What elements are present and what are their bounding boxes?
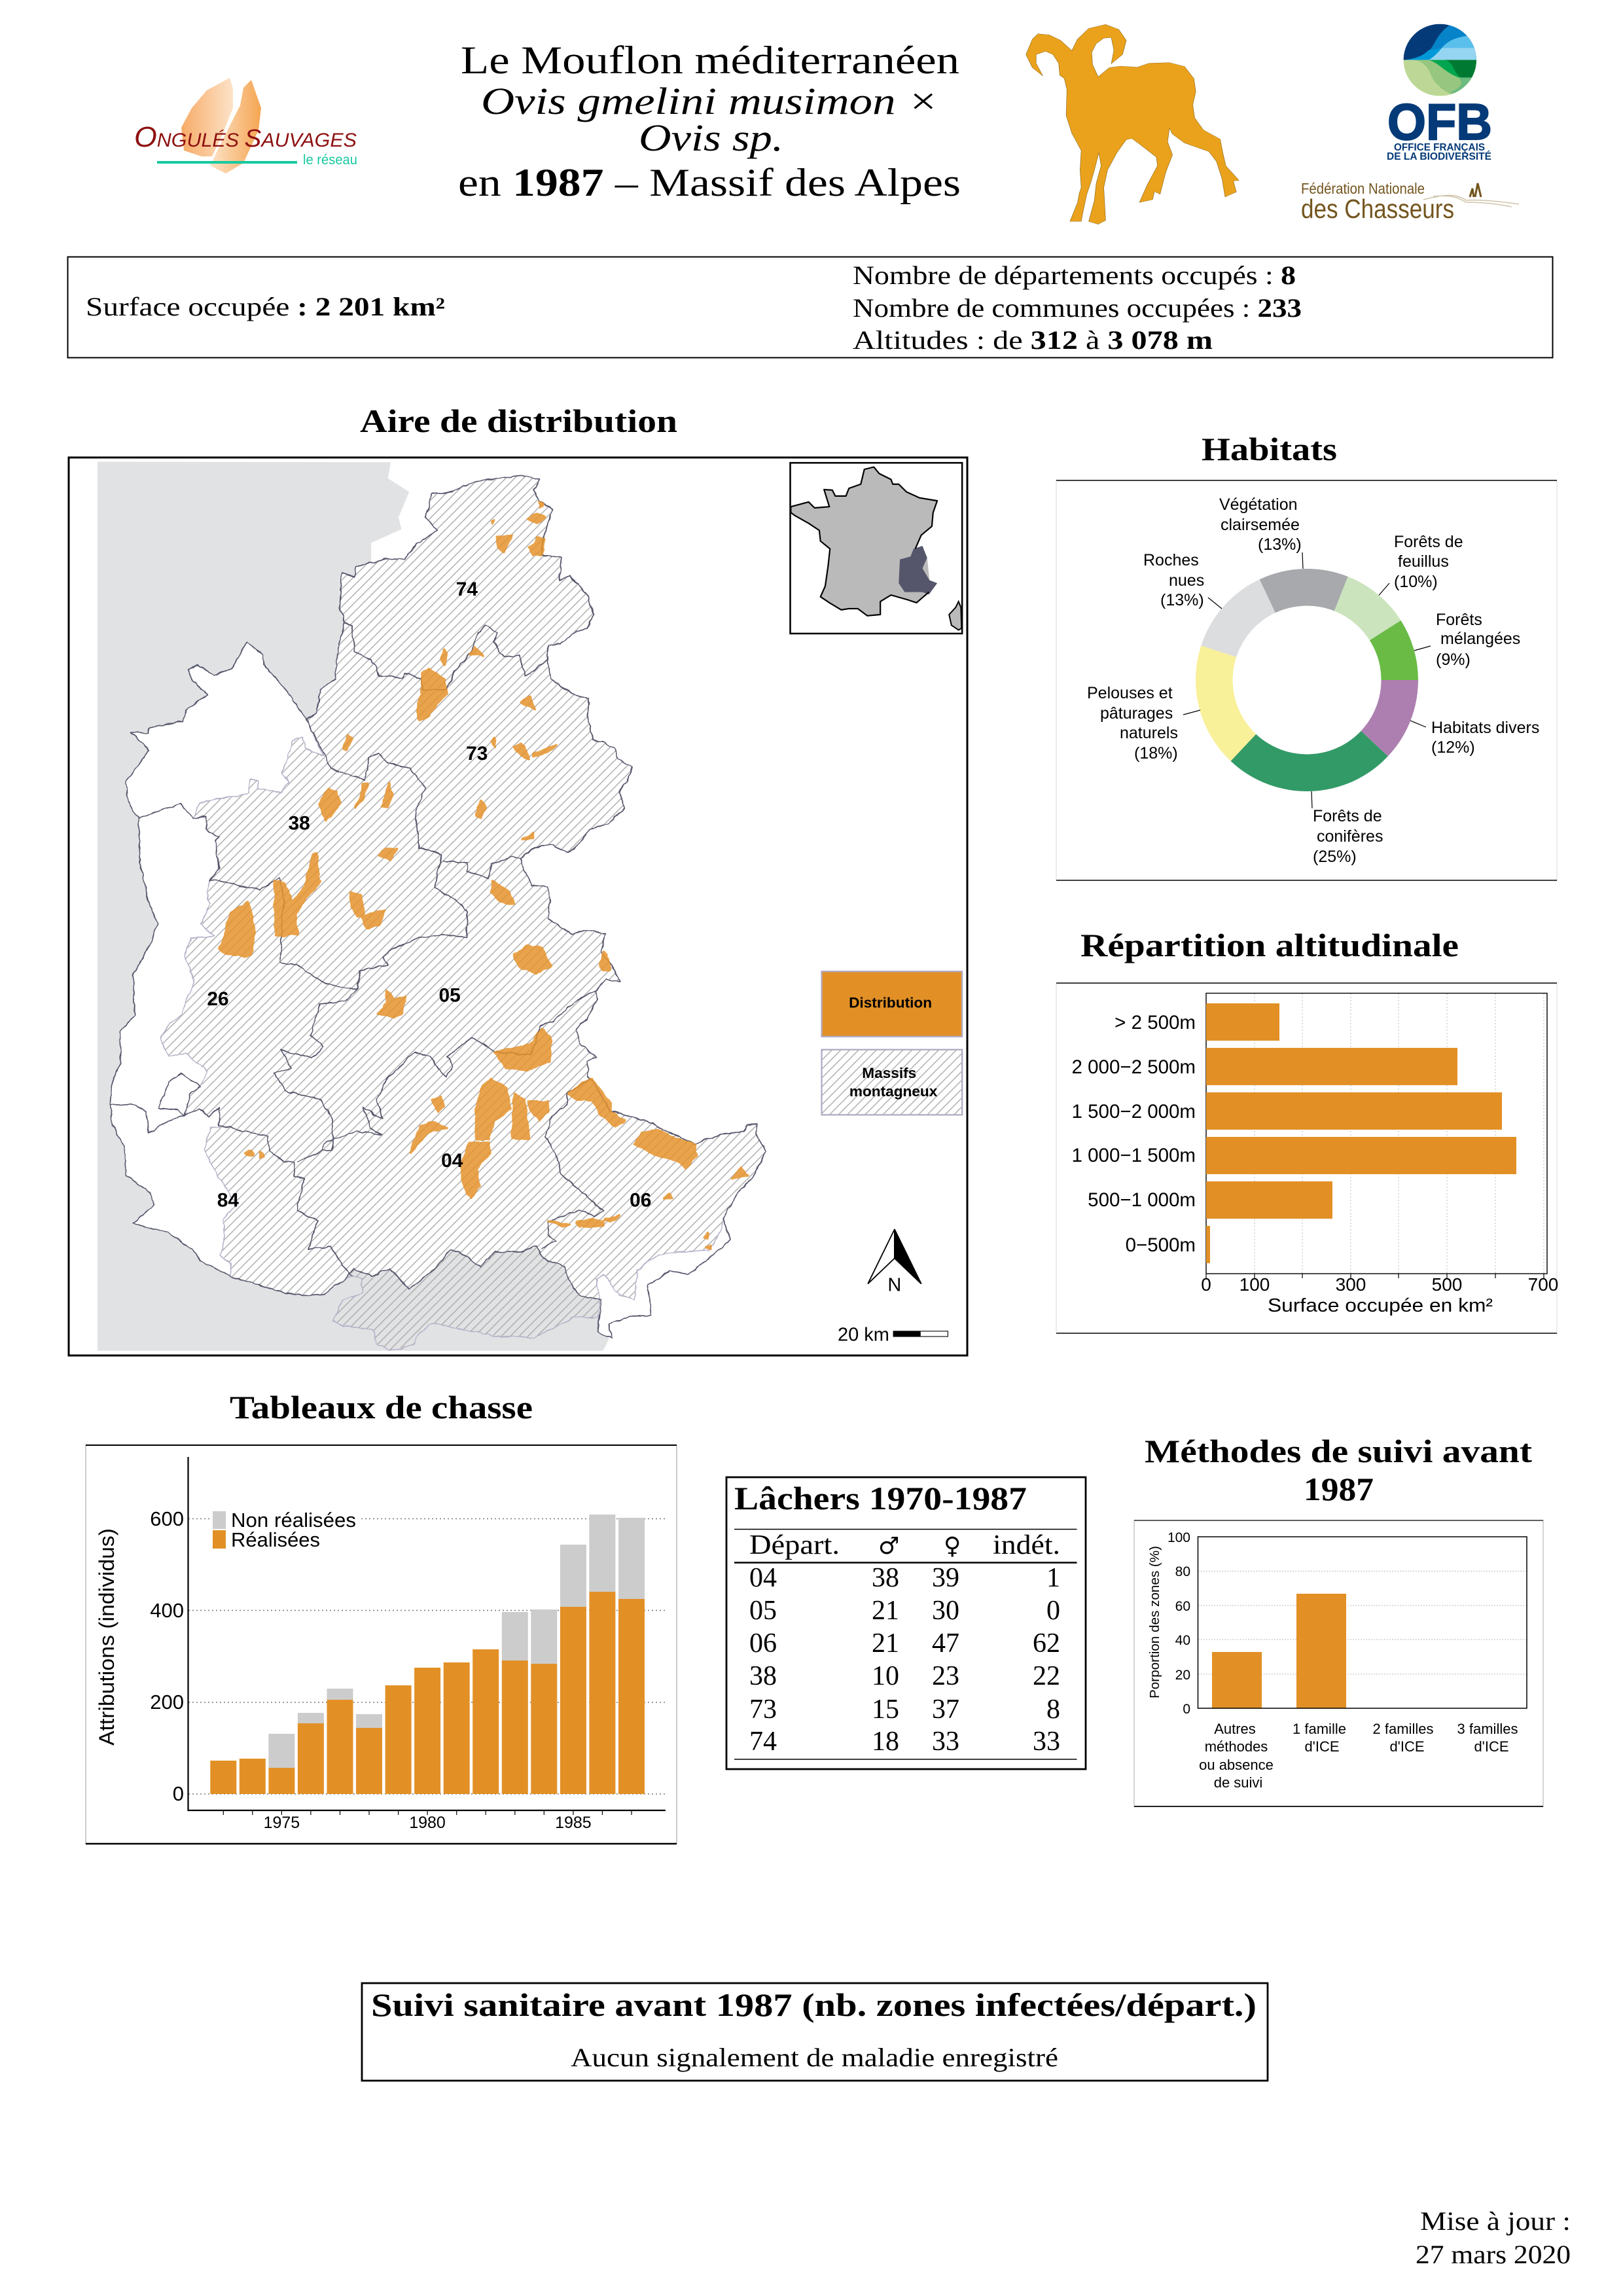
icon: north arrow (868, 1229, 921, 1295)
table rows: 8 (1046, 1695, 1060, 1725)
category labels: > 2 500m (1115, 1012, 1196, 1033)
logo: Fédération Nationale des Chasseurs (1301, 180, 1519, 224)
logo: Fédération Nationale des Chasseurs: des Chasseurs (1301, 194, 1454, 224)
table rows: 21 (872, 1628, 899, 1659)
axis labels (264, 1814, 592, 1832)
title: Ovis gmelini musimon × (481, 80, 938, 122)
logo: OFB: OFFICE FRANÇAIS (1394, 142, 1485, 153)
table header: indét. (993, 1530, 1060, 1560)
table header: Départ. (749, 1530, 840, 1560)
table rows: 21 (872, 1596, 899, 1626)
category labels: 3 familles (1457, 1721, 1518, 1737)
panel: hunting bag stacked bar chart (86, 1445, 677, 1844)
x axis title: Surface occupée en km² (1268, 1295, 1493, 1316)
legend (211, 1509, 360, 1551)
text: no disease recorded: Aucun signalement de maladie enregistré (571, 2043, 1058, 2072)
table rules (734, 1529, 1077, 1759)
category labels: d'ICE (1389, 1738, 1425, 1755)
logo: Ongulés sauvages (134, 78, 357, 173)
category labels: 500−1 000m (1088, 1189, 1196, 1211)
y axis labels: 600 (150, 1507, 184, 1530)
panel: Lâchers table (726, 1477, 1086, 1769)
legend: massifs montagneux: montagneux (849, 1083, 938, 1100)
table rows: 33 (932, 1727, 959, 1757)
table rows: 04 (749, 1563, 777, 1593)
table rows: 74 (749, 1727, 777, 1757)
table header (749, 1530, 1060, 1560)
realised bars (210, 1592, 645, 1794)
table rows: 1 (1046, 1563, 1060, 1593)
donut labels: Forêts (1436, 611, 1482, 629)
category labels: d'ICE (1304, 1738, 1340, 1755)
donut labels: conifères (1317, 827, 1383, 846)
heading: Méthodes de suivi avant 1987: Méthodes de suivi avant (1145, 1433, 1532, 1469)
y labels: 60 (1175, 1599, 1190, 1614)
donut labels: (18%) (1134, 744, 1178, 762)
text: communes occupied: Nombre de communes occupées : 233 (853, 293, 1302, 323)
logo: OFB: DE LA BIODIVERSITÉ (1387, 150, 1491, 162)
table rows: 23 (932, 1661, 959, 1691)
donut labels: (12%) (1431, 738, 1475, 757)
text: last update (1416, 2206, 1571, 2269)
donut labels: feuillus (1398, 552, 1449, 571)
label: department numbers: 04 (441, 1150, 463, 1172)
donut leader lines (1183, 552, 1431, 808)
map: massif outline (160, 475, 766, 1351)
grid lines (188, 1518, 666, 1794)
label: department numbers: 74 (456, 579, 478, 600)
map: department borders (111, 475, 766, 1338)
label: department numbers: 84 (217, 1190, 239, 1211)
donut labels: (25%) (1313, 848, 1357, 866)
table rows: 62 (1033, 1628, 1060, 1659)
table rows: 39 (932, 1563, 959, 1593)
text: last update: Mise à jour : (1420, 2206, 1571, 2236)
donut labels: nues (1169, 571, 1204, 590)
map: species distribution patches (220, 501, 747, 1249)
table rows: 22 (1033, 1661, 1060, 1691)
text: altitudes: Altitudes : de 312 à 3 078 m (853, 325, 1213, 355)
y axis labels: 200 (150, 1691, 184, 1713)
y axis title: Porportion des zones (%) (1148, 1546, 1162, 1698)
panel: key figures (68, 257, 1552, 357)
label: department numbers: 26 (207, 988, 229, 1010)
category labels: ou absence (1199, 1757, 1274, 1773)
label: department numbers: 38 (288, 813, 310, 834)
category labels: Autres (1214, 1721, 1256, 1737)
legend: distribution: Distribution (849, 994, 932, 1011)
scale bar (838, 1324, 948, 1345)
axis labels: 1985 (555, 1814, 592, 1832)
category labels: 2 familles (1373, 1721, 1433, 1737)
y labels (1168, 1530, 1190, 1717)
label: department numbers: 05 (438, 984, 461, 1006)
axes (188, 1457, 666, 1810)
inset: France locator map (791, 463, 962, 634)
y labels: 80 (1175, 1564, 1190, 1579)
heading: Répartition altitudinale: Répartition altitudinale (1080, 927, 1459, 963)
title (458, 39, 961, 204)
label: department numbers: 06 (630, 1190, 651, 1211)
donut labels: Végétation (1219, 495, 1298, 514)
bars (1212, 1594, 1346, 1708)
grid lines (1255, 994, 1544, 1274)
logo: OFB (1387, 24, 1492, 162)
title: en 1987 – Massif des Alpes (458, 161, 961, 204)
donut labels: naturels (1120, 724, 1178, 742)
text: departments occupied: Nombre de départements occupés : 8 (853, 260, 1296, 290)
donut labels: Forêts de (1313, 807, 1382, 825)
heading: Méthodes de suivi avant 1987: 1987 (1304, 1471, 1374, 1507)
x axis labels: 0 (1201, 1274, 1211, 1295)
heading: Méthodes de suivi avant 1987 (1145, 1433, 1532, 1507)
table rows: 30 (932, 1596, 959, 1626)
x ticks (223, 1810, 632, 1815)
donut labels: pâturages (1100, 704, 1173, 723)
logo: Ongulés sauvages: le réseau (303, 152, 357, 168)
heading: Aire de distribution: Aire de distribution (360, 403, 677, 439)
label: department numbers: 73 (466, 743, 488, 764)
category labels: 1 famille (1293, 1721, 1346, 1737)
y axis title: Attributions (individus) (95, 1528, 118, 1746)
table rows: 73 (749, 1695, 777, 1725)
table rows: 37 (932, 1695, 959, 1725)
map: hatched mountain massifs (160, 475, 766, 1351)
text: last update: 27 mars 2020 (1416, 2240, 1571, 2269)
heading: Habitats: Habitats (1202, 431, 1337, 467)
table header: ♀ (944, 1533, 961, 1560)
label: department numbers (207, 579, 651, 1211)
category labels (1199, 1721, 1518, 1791)
panel: monitoring methods bar chart (1134, 1520, 1543, 1806)
x axis labels: 100 (1240, 1274, 1270, 1295)
axis labels: 1975 (264, 1814, 300, 1832)
donut labels (1087, 495, 1539, 866)
legend: Non réalisées (231, 1509, 356, 1532)
table header: ♂ (878, 1533, 899, 1560)
plot frame (1206, 994, 1547, 1274)
donut labels: clairsemée (1221, 516, 1300, 534)
x axis labels: 700 (1528, 1274, 1558, 1295)
map: study region (111, 475, 766, 1338)
non-realised bars (268, 1515, 645, 1768)
table rows: 10 (872, 1661, 899, 1691)
table rows: 15 (872, 1695, 899, 1725)
x axis labels: 300 (1336, 1274, 1366, 1295)
heading: suivi sanitaire: Suivi sanitaire avant 1987 (nb. zones infectées/départ.) (371, 1986, 1257, 2023)
y axis labels: 0 (173, 1782, 184, 1805)
y labels: 0 (1183, 1702, 1190, 1717)
icon: mouflon silhouette (1026, 24, 1239, 224)
donut labels: mélangées (1440, 630, 1520, 648)
y labels: 20 (1175, 1668, 1190, 1683)
category labels (1072, 1012, 1196, 1256)
text: surface occupied: Surface occupée : 2 201 km² (86, 292, 445, 321)
table rows: 47 (932, 1628, 959, 1659)
scale bar: 20 km (838, 1324, 889, 1345)
logo: Ongulés sauvages: ONGULÉS SAUVAGES (134, 121, 357, 153)
table rows: 06 (749, 1628, 777, 1659)
donut labels: (9%) (1436, 651, 1471, 669)
heading: Tableaux de chasse: Tableaux de chasse (230, 1389, 533, 1426)
table rows: 38 (872, 1563, 899, 1593)
logo: OFB: OFB (1387, 93, 1492, 151)
table rows: 33 (1033, 1727, 1060, 1757)
category labels: 2 000−2 500m (1072, 1056, 1196, 1078)
table rows: 18 (872, 1727, 899, 1757)
panel: distribution map (69, 457, 967, 1355)
panel: habitats donut chart (1056, 480, 1557, 880)
title: Ovis sp. (639, 117, 783, 159)
legend: Réalisées (231, 1528, 320, 1551)
logo: Fédération Nationale des Chasseurs: Fédération Nationale (1301, 180, 1425, 197)
donut labels: Habitats divers (1431, 719, 1539, 737)
category labels: 1 000−1 500m (1072, 1145, 1196, 1166)
legend: massifs montagneux (822, 1050, 962, 1115)
y axis labels (150, 1507, 184, 1805)
y labels: 100 (1168, 1530, 1190, 1545)
table title: Lâchers 1970-1987 (734, 1480, 1027, 1516)
donut labels: (13%) (1160, 591, 1204, 609)
category labels: méthodes (1205, 1738, 1268, 1755)
panel: suivi sanitaire (362, 1983, 1268, 2081)
donut labels: Pelouses et (1087, 684, 1173, 702)
title: Le Mouflon méditerranéen (461, 39, 959, 82)
category labels: 0−500m (1126, 1234, 1196, 1256)
category labels: de suivi (1214, 1774, 1262, 1791)
legend: distribution (822, 971, 962, 1037)
category labels: d'ICE (1474, 1738, 1509, 1755)
map: neighbouring land (98, 461, 609, 1351)
legend: massifs montagneux: Massifs (862, 1065, 916, 1081)
donut labels: (13%) (1258, 535, 1302, 554)
table rows: 0 (1046, 1596, 1060, 1626)
category labels: 1 500−2 000m (1072, 1101, 1196, 1122)
donut labels: (10%) (1394, 573, 1438, 591)
icon: north arrow: N (887, 1274, 901, 1295)
table rows: 05 (749, 1596, 777, 1626)
panel: altitudinal bar chart (1056, 983, 1558, 1333)
grid lines (1198, 1571, 1527, 1674)
y labels: 40 (1175, 1633, 1190, 1648)
plot frame (1198, 1537, 1527, 1708)
donut segments (1196, 569, 1418, 791)
bars (1206, 1003, 1516, 1263)
x axis labels (1201, 1274, 1558, 1295)
table rows (749, 1563, 1060, 1757)
y axis labels: 400 (150, 1599, 184, 1622)
table rows: 38 (749, 1661, 777, 1691)
x axis ticks (1206, 1274, 1544, 1278)
donut labels: Roches (1143, 551, 1199, 569)
axis labels: 1980 (409, 1814, 446, 1832)
x axis labels: 500 (1432, 1274, 1462, 1295)
donut labels: Forêts de (1394, 533, 1463, 551)
